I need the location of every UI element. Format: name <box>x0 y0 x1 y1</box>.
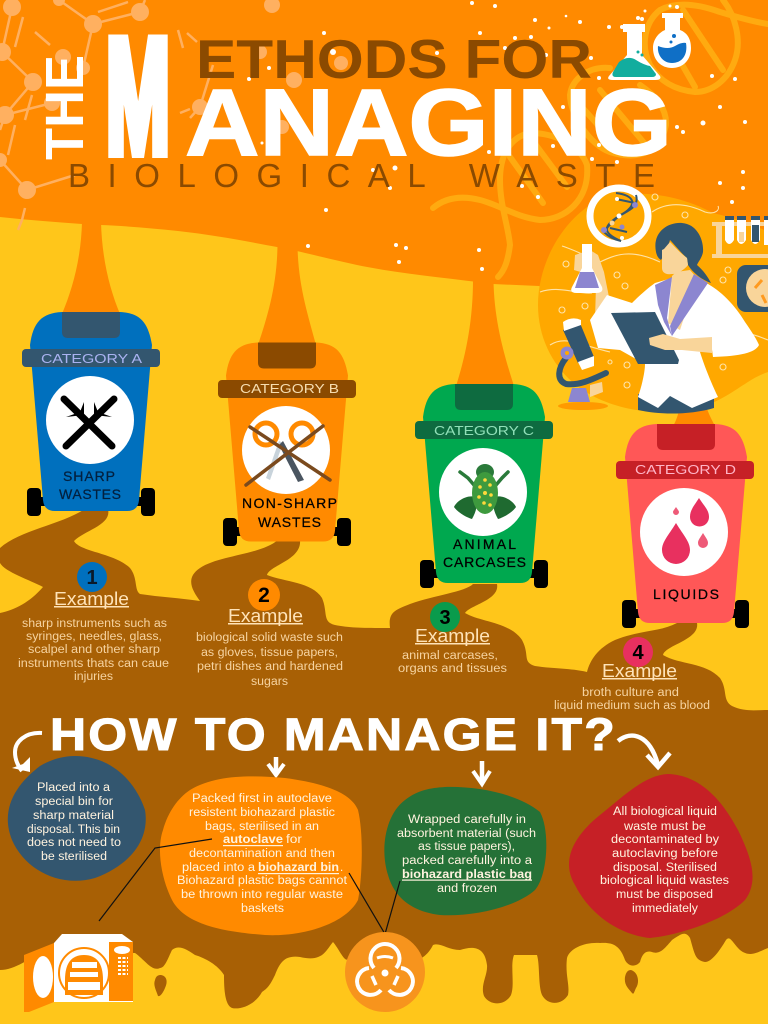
example 2 <box>196 579 343 688</box>
panel: bin category B <box>218 342 356 546</box>
category band <box>616 461 754 479</box>
panel: red bubble <box>569 774 753 938</box>
example text <box>554 687 710 712</box>
example text: as gloves, tissue papers, <box>201 647 338 659</box>
icon: dna badge <box>590 188 648 244</box>
example text: animal carcases, <box>402 650 498 662</box>
panel: green bubble <box>384 787 546 915</box>
bin body <box>625 424 747 623</box>
wheels <box>27 488 155 516</box>
bubble text: Packed first in autoclave <box>192 793 332 805</box>
bubble text: resistent biohazard plastic <box>189 807 335 819</box>
heading: how to manage it: HOW TO MANAGE IT? <box>50 709 617 760</box>
chest skin <box>668 270 697 330</box>
category band <box>415 421 553 439</box>
example heading: Example <box>602 661 677 681</box>
scientist raised arm <box>574 250 610 320</box>
category band <box>22 349 160 367</box>
bubble text <box>600 806 729 915</box>
lid handle <box>657 424 715 450</box>
bubble text: sharp material <box>33 810 114 822</box>
number badge 4: 4 <box>632 642 644 664</box>
title word: the: THE <box>35 55 95 160</box>
example 4 <box>554 637 710 712</box>
bin body <box>30 312 152 511</box>
icon: teal flask <box>608 24 660 80</box>
bubble text: as tissue papers), <box>418 841 515 853</box>
number badge 4 <box>623 637 653 667</box>
bubble text: placed into a <box>182 862 256 874</box>
bubble text: bags, sterilised in an <box>205 821 319 833</box>
lid handle <box>258 342 316 368</box>
arrow to red bubble <box>618 736 670 767</box>
bubble text: absorbent material (such <box>397 828 536 840</box>
bin label: SHARP <box>63 468 115 484</box>
icon: autoclave <box>24 934 133 1012</box>
trousers <box>638 394 714 414</box>
bubble text: autoclave <box>223 834 283 846</box>
amber backdrop blob <box>538 194 768 412</box>
bubble text: biohazard plastic bag <box>402 869 532 881</box>
number badge 1 <box>77 562 107 592</box>
example text: biological solid waste such <box>196 632 343 644</box>
small brown drips <box>154 970 638 996</box>
illustration: scientist <box>538 188 768 414</box>
bin label: CARCASES <box>443 554 526 570</box>
example text <box>196 632 343 688</box>
bin label: WASTES <box>59 486 121 502</box>
bubble text: baskets <box>241 903 284 915</box>
number badge 2: 2 <box>258 584 270 607</box>
example text: sugars <box>251 676 288 688</box>
hair <box>655 223 711 283</box>
wheels <box>622 600 749 628</box>
example 1 <box>18 562 169 683</box>
category label: CATEGORY A <box>41 352 143 366</box>
purple collar <box>655 274 708 336</box>
bubble text: be sterilised <box>41 851 107 863</box>
bubble text: packed carefully into a <box>402 855 533 867</box>
number badge 3: 3 <box>439 607 451 629</box>
bubble text: biohazard bin <box>258 862 339 874</box>
bin label <box>59 468 121 502</box>
hand and forearm <box>649 334 712 353</box>
stems: orange drips into bins <box>62 222 716 428</box>
example text <box>398 650 507 675</box>
example text: injuries <box>74 671 113 683</box>
example text: instruments thats can caue <box>18 658 169 670</box>
lid handle <box>62 312 120 338</box>
bubble text: does not need to <box>27 837 121 849</box>
bubble text: . <box>340 862 343 874</box>
icon: crossed scissors <box>242 406 330 494</box>
icon: blue flask <box>653 13 691 68</box>
icon: drops <box>640 488 728 576</box>
connector lines <box>99 839 400 934</box>
wheels <box>223 518 351 546</box>
bubble text <box>27 782 121 863</box>
bubble text: Wrapped carefully in <box>408 814 526 826</box>
bubble text: biological liquid wastes <box>600 875 729 887</box>
category label: CATEGORY D <box>635 463 736 477</box>
bubble text: disposal. This bin <box>27 824 120 836</box>
panel: bin category C <box>415 384 553 588</box>
example text <box>18 618 169 683</box>
example heading: Example <box>54 589 129 609</box>
panel: orange bubble <box>160 776 362 935</box>
lid handle <box>455 384 513 410</box>
icon: handheld flask <box>571 244 602 293</box>
bubble text: immediately <box>632 903 698 915</box>
category label: CATEGORY C <box>434 424 534 438</box>
orange header wave <box>0 0 768 300</box>
bin body <box>423 384 545 583</box>
icon: crossed swords <box>46 376 134 464</box>
bin label: ANIMAL <box>453 536 516 552</box>
bubble text: for <box>286 834 302 846</box>
clipboard <box>611 312 679 364</box>
bin label <box>443 536 526 570</box>
example heading: Example <box>228 606 303 626</box>
bubble text: be thrown into regular waste <box>181 889 343 901</box>
number badge 2 <box>248 579 280 611</box>
microscope <box>558 318 608 410</box>
bubble text: special bin for <box>35 796 113 808</box>
example text: broth culture and <box>582 687 679 699</box>
panel: blue bubble <box>8 756 146 881</box>
icon: biohazard symbol <box>345 932 425 1012</box>
example text: sharp instruments such as <box>22 618 167 630</box>
category label: CATEGORY B <box>240 382 339 396</box>
arrow to green bubble <box>473 761 490 784</box>
bin label: WASTES <box>258 514 321 530</box>
bubble text: disposal. Sterilised <box>613 862 717 874</box>
bubble text: All biological liquid <box>613 806 717 818</box>
DNA helix decoration <box>433 0 768 277</box>
bin body <box>226 342 348 542</box>
example text: liquid medium such as blood <box>554 700 710 712</box>
bubble text: Placed into a <box>37 782 111 794</box>
bin label: NON-SHARP <box>242 495 337 511</box>
bubble text <box>177 793 348 915</box>
arrow to orange bubble <box>268 757 284 775</box>
number badge 1: 1 <box>86 567 98 589</box>
brown waste river and lower panel <box>0 509 768 1008</box>
example text: organs and tissues <box>398 663 507 675</box>
example text: scalpel and other sharp <box>28 644 160 656</box>
bubble text: Biohazard plastic bags cannot <box>177 875 348 887</box>
bin label: LIQUIDS <box>653 586 719 602</box>
lab coat <box>590 275 759 408</box>
wavy lines and bubbles <box>540 194 768 388</box>
bubble text: must be disposed <box>616 889 713 901</box>
test tube rack <box>712 216 768 258</box>
panel: bin category A <box>22 312 160 516</box>
wheels <box>420 560 548 588</box>
face <box>662 242 688 274</box>
bubble text <box>397 814 536 895</box>
title: The Methods for Managing Biological Waste <box>35 6 672 194</box>
bubble text: waste must be <box>623 821 706 833</box>
example 3 <box>398 602 507 675</box>
molecule network decoration <box>0 0 348 230</box>
bin label <box>242 495 337 530</box>
bubble text: autoclaving before <box>612 848 718 860</box>
example text: petri dishes and hardened <box>197 661 343 673</box>
icon: frog <box>439 448 527 536</box>
example text: syringes, needles, glass, <box>26 631 162 643</box>
bubble text: and frozen <box>437 883 497 895</box>
category band <box>218 380 356 398</box>
title: ethods for: ETHODS FOR <box>196 28 592 90</box>
arrow to blue bubble <box>12 733 42 772</box>
example heading: Example <box>415 626 490 646</box>
petri dish panel <box>737 265 768 312</box>
title: anaging: ANAGING <box>185 70 672 176</box>
title: The Methods for Managing Biological Waste: M <box>106 6 170 187</box>
bubble text: decontamination and then <box>189 848 335 860</box>
bubble text: decontaminated by <box>611 834 719 846</box>
subtitle: biological waste: BIOLOGICAL WASTE <box>68 157 655 194</box>
panel: bin category D <box>616 424 754 628</box>
white dots <box>247 1 747 271</box>
